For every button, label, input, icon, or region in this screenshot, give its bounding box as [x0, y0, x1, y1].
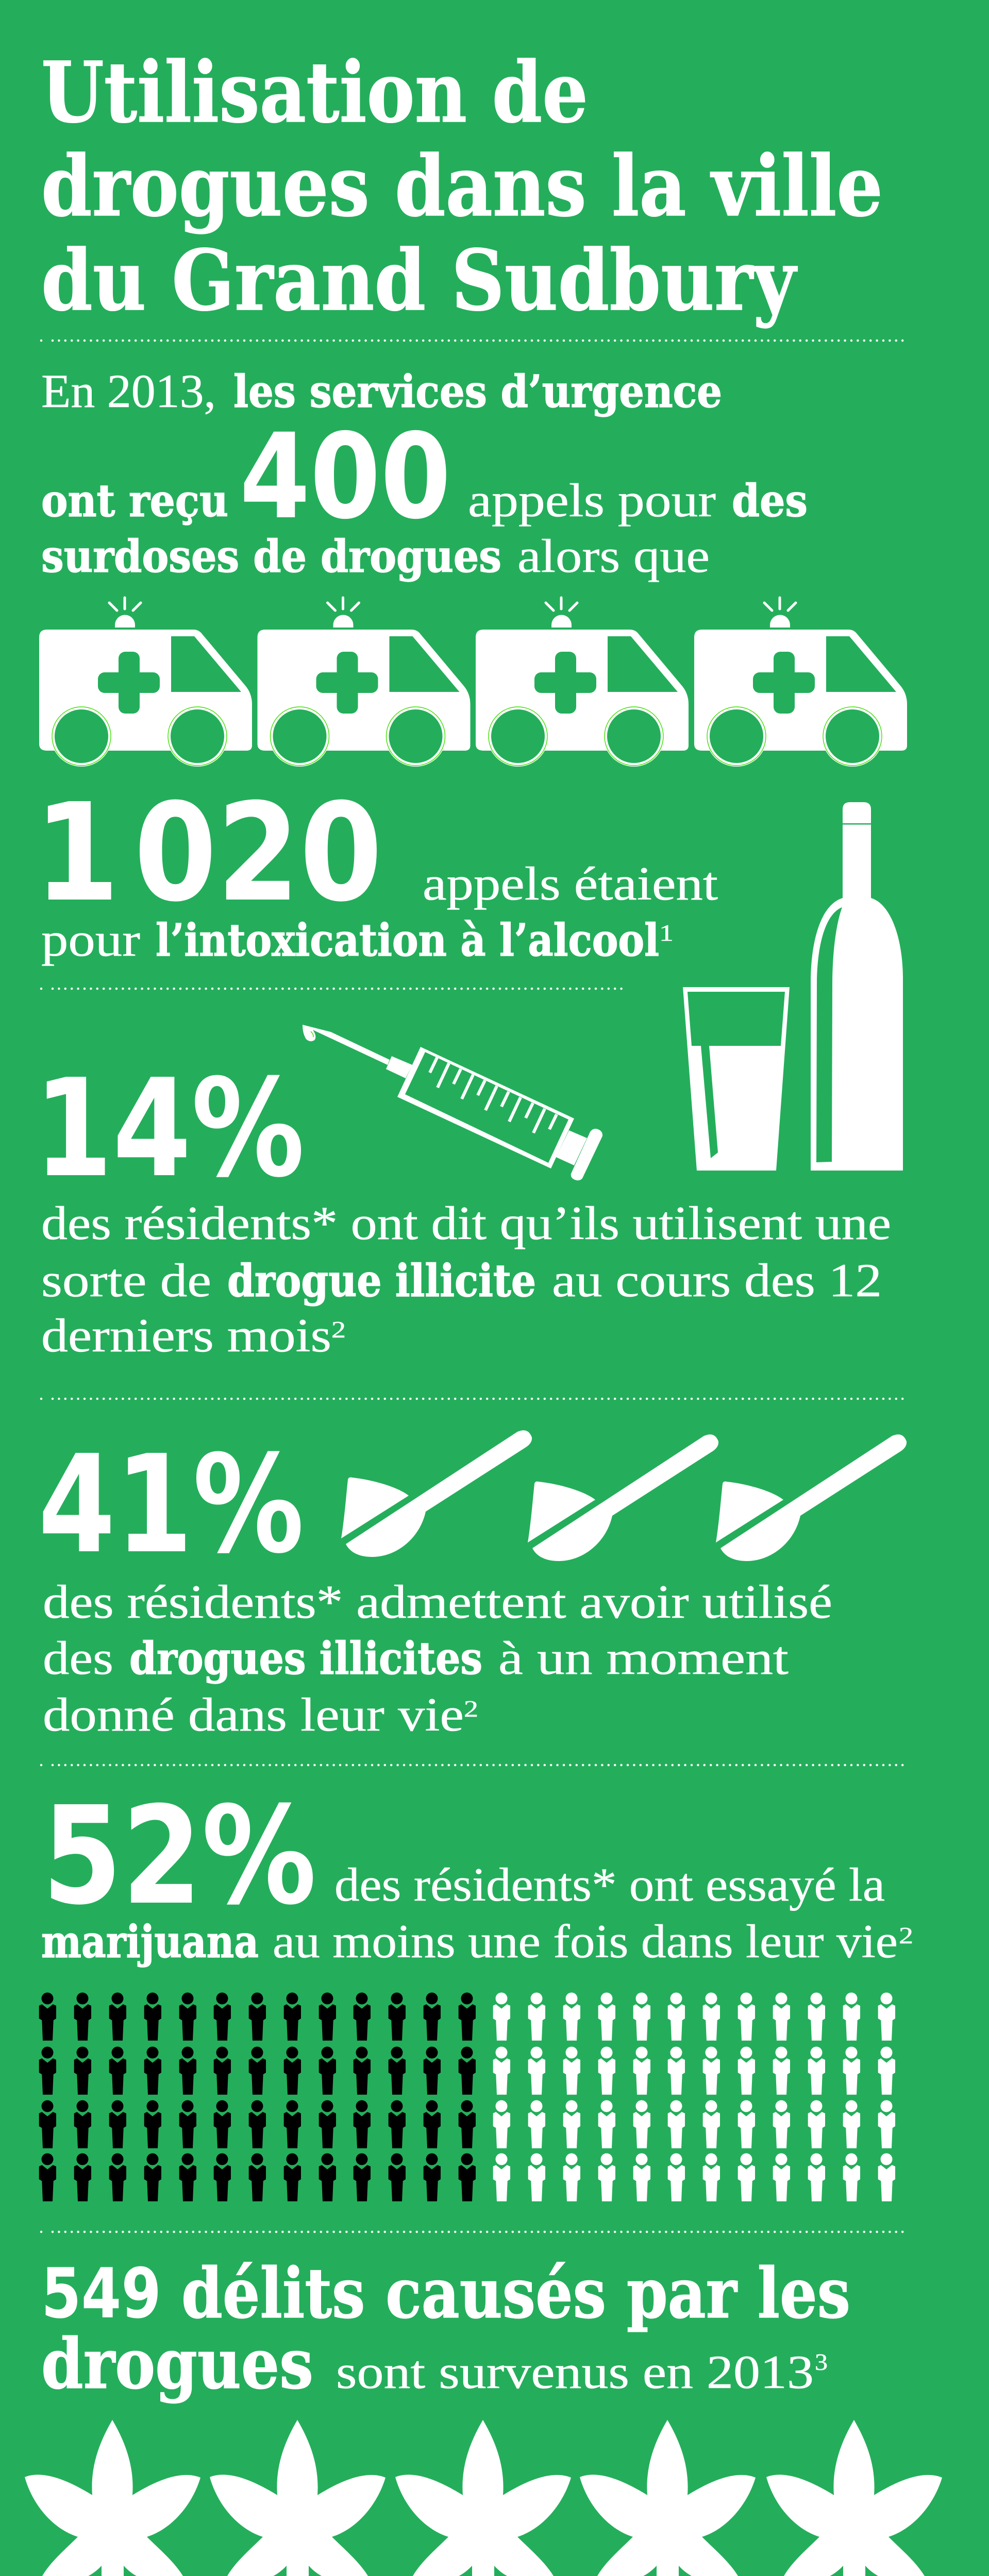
icon: ambulance 2 — [258, 598, 470, 767]
title: Utilisation de — [41, 44, 588, 142]
text: emergency services 400 calls: 400 — [240, 408, 451, 545]
text: emergency services 400 calls: des — [732, 475, 808, 527]
text: 52%: des résidents* ont essayé la — [334, 1858, 885, 1911]
text: emergency services 400 calls — [41, 365, 808, 583]
text: 14%: sorte de — [41, 1254, 211, 1307]
text: 1 020 alcohol calls: 1 — [659, 920, 674, 946]
text: 14%: derniers mois — [41, 1309, 331, 1362]
text: 549 offences: 549 — [41, 2253, 161, 2334]
icon: spoon 2 — [528, 1434, 718, 1561]
icon: cannabis leaf 5 — [766, 2420, 942, 2576]
text: 41%: 2 — [464, 1696, 478, 1722]
icon: ambulance 3 — [476, 598, 689, 767]
text: 549 offences: 3 — [815, 2349, 828, 2375]
text: emergency services 400 calls: ont reçu — [41, 475, 228, 527]
icon: cannabis leaf 3 — [395, 2420, 571, 2576]
text: 14%: 14% — [34, 1050, 305, 1207]
icon: cannabis leaf 2 — [210, 2420, 385, 2576]
text: 41%: des résidents* admettent avoir utilisé — [43, 1575, 832, 1628]
title: du Grand Sudbury — [41, 232, 797, 330]
text: 52%: 52% — [42, 1777, 316, 1935]
pictogram: 48 white people — [493, 1993, 895, 2201]
text: 41%: des — [43, 1632, 113, 1684]
pictogram: 52 black people — [39, 1993, 476, 2201]
text: emergency services 400 calls: alors que — [517, 530, 710, 582]
icon: syringe — [303, 1025, 602, 1180]
text: 1 020 alcohol calls: 020 — [134, 774, 382, 931]
text: 1 020 alcohol calls: appels étaient — [423, 857, 718, 910]
icon: cannabis leaf 4 — [580, 2420, 756, 2576]
icon: glass — [683, 987, 790, 1171]
text: 41%: drogues illicites — [129, 1633, 482, 1685]
text: 549 offences: délits causés par les — [181, 2252, 850, 2334]
text: 1 020 alcohol calls: 1 — [34, 774, 120, 931]
text: 14%: drogue illicite — [227, 1255, 536, 1307]
text: 549 offences — [41, 2252, 850, 2404]
icon: cannabis leaf 1 — [25, 2420, 200, 2576]
text: 549 offences: drogues — [41, 2323, 313, 2404]
text: 1 020 alcohol calls — [34, 774, 718, 967]
text: emergency services 400 calls: les services d’urgence — [233, 366, 722, 418]
text: 52%: au moins une fois dans leur vie — [273, 1915, 898, 1968]
text: 1 020 alcohol calls: l’intoxication à l’alcool — [156, 914, 659, 967]
text: 41%: à un moment — [498, 1632, 789, 1684]
text: 1 020 alcohol calls: pour — [41, 913, 140, 966]
text: 14% — [34, 1050, 891, 1362]
text: 52%: 2 — [899, 1922, 913, 1948]
icon: bottle — [811, 802, 903, 1171]
text: 52%: marijuana — [41, 1916, 259, 1968]
title: drogues dans la ville — [41, 138, 883, 235]
icon: spoon 3 — [716, 1434, 907, 1561]
icon: ambulance 4 — [694, 598, 907, 767]
text: 549 offences: sont survenus en 2013 — [336, 2346, 814, 2398]
text: 41% — [38, 1426, 832, 1741]
text: emergency services 400 calls: appels pour — [468, 474, 716, 527]
text: 14%: au cours des 12 — [552, 1254, 882, 1307]
text: 14%: des résidents* ont dit qu’ils utilisent une — [41, 1197, 891, 1249]
text: 14%: 2 — [331, 1316, 346, 1343]
text: 41%: donné dans leur vie — [43, 1688, 464, 1741]
text: 52% — [41, 1777, 913, 1968]
icon: ambulance 1 — [39, 598, 252, 767]
text: emergency services 400 calls: surdoses de drogues — [41, 531, 501, 583]
title — [41, 44, 883, 330]
text: emergency services 400 calls: En 2013, — [41, 365, 216, 417]
text: 41%: 41% — [38, 1426, 304, 1583]
icon: spoon 1 — [341, 1430, 532, 1557]
